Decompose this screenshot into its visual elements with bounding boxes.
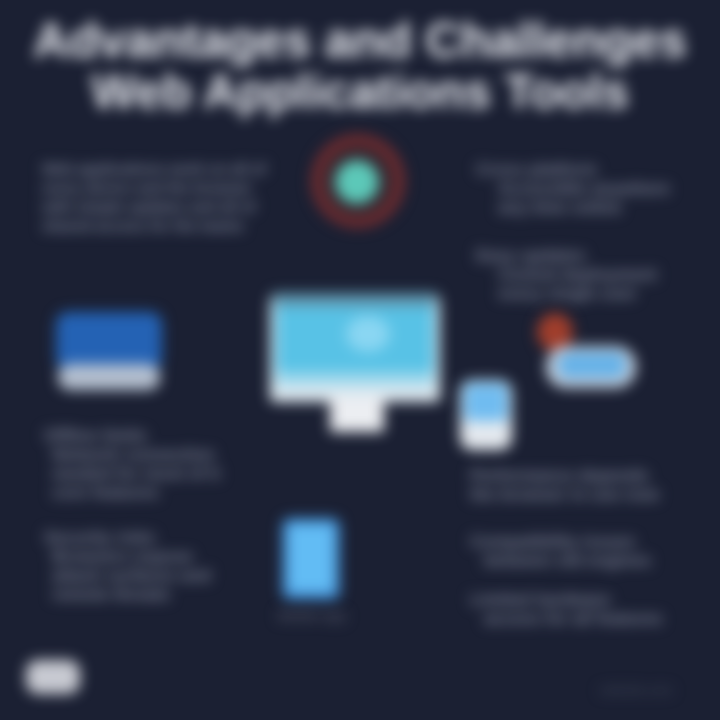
text block: middle right xyxy=(472,244,660,308)
footer text: website.com xyxy=(600,683,672,697)
text block: right lower three: access for all features xyxy=(484,609,663,628)
text block: right lower three: Limited hardware xyxy=(470,590,611,609)
text block: top right: Accessible anywhere xyxy=(498,179,670,198)
title: Web Applications Tools xyxy=(91,66,629,119)
text block: right lower one xyxy=(466,464,662,506)
icon: blue database xyxy=(46,302,172,400)
text block: right lower two: between old engines xyxy=(484,551,651,570)
text block: left lower two xyxy=(41,526,214,606)
text block: top left xyxy=(38,158,270,238)
text block: right lower one: Performance depends xyxy=(470,466,649,485)
text block: left lower two: Security risks xyxy=(44,528,156,547)
icon: phone right xyxy=(449,369,523,461)
text block: left lower two: remote threats xyxy=(52,585,170,604)
icon: cloud with red badge xyxy=(528,304,646,399)
text block: top right xyxy=(473,158,672,220)
icon: phone bottom xyxy=(272,508,350,610)
text block: top left: Web applications work on all of xyxy=(42,161,266,178)
text block: right lower one: the browser in use now xyxy=(470,485,659,504)
text block: left lower one: Network connection xyxy=(52,445,214,464)
text block: top right: Cross platform xyxy=(476,160,597,179)
icon: desktop monitor xyxy=(259,284,451,444)
text block: left lower two: attack surfaces and xyxy=(52,566,211,585)
text block: right lower three xyxy=(468,588,665,630)
text block: left lower one: needed for most of it xyxy=(52,464,220,483)
icon: target circle xyxy=(303,126,413,236)
text block: middle right: Easy updates xyxy=(476,246,586,265)
text block: top right: any time online xyxy=(498,198,622,217)
title: Advantages and Challenges xyxy=(33,14,687,68)
text block: left lower one: Offline limits xyxy=(44,426,147,445)
text block: right lower two: Compatibility issues xyxy=(470,532,635,551)
text block: middle right: every single user xyxy=(498,284,637,303)
text block: right lower two xyxy=(467,530,654,574)
text block: top left: shared access for the teams xyxy=(42,218,244,235)
title xyxy=(26,12,694,126)
caption: bottom phone: Mobile app xyxy=(278,608,346,623)
text block: top left: every device and the browser xyxy=(42,180,252,197)
text block: left lower one: core features xyxy=(52,483,159,502)
text block: middle right: Central deployment xyxy=(498,265,657,284)
text block: left lower two: Browsers expose xyxy=(52,547,193,566)
text block: top left: with simple updates and all of xyxy=(42,199,255,216)
logo: bottom left xyxy=(26,660,80,694)
text block: left lower one xyxy=(41,422,224,504)
